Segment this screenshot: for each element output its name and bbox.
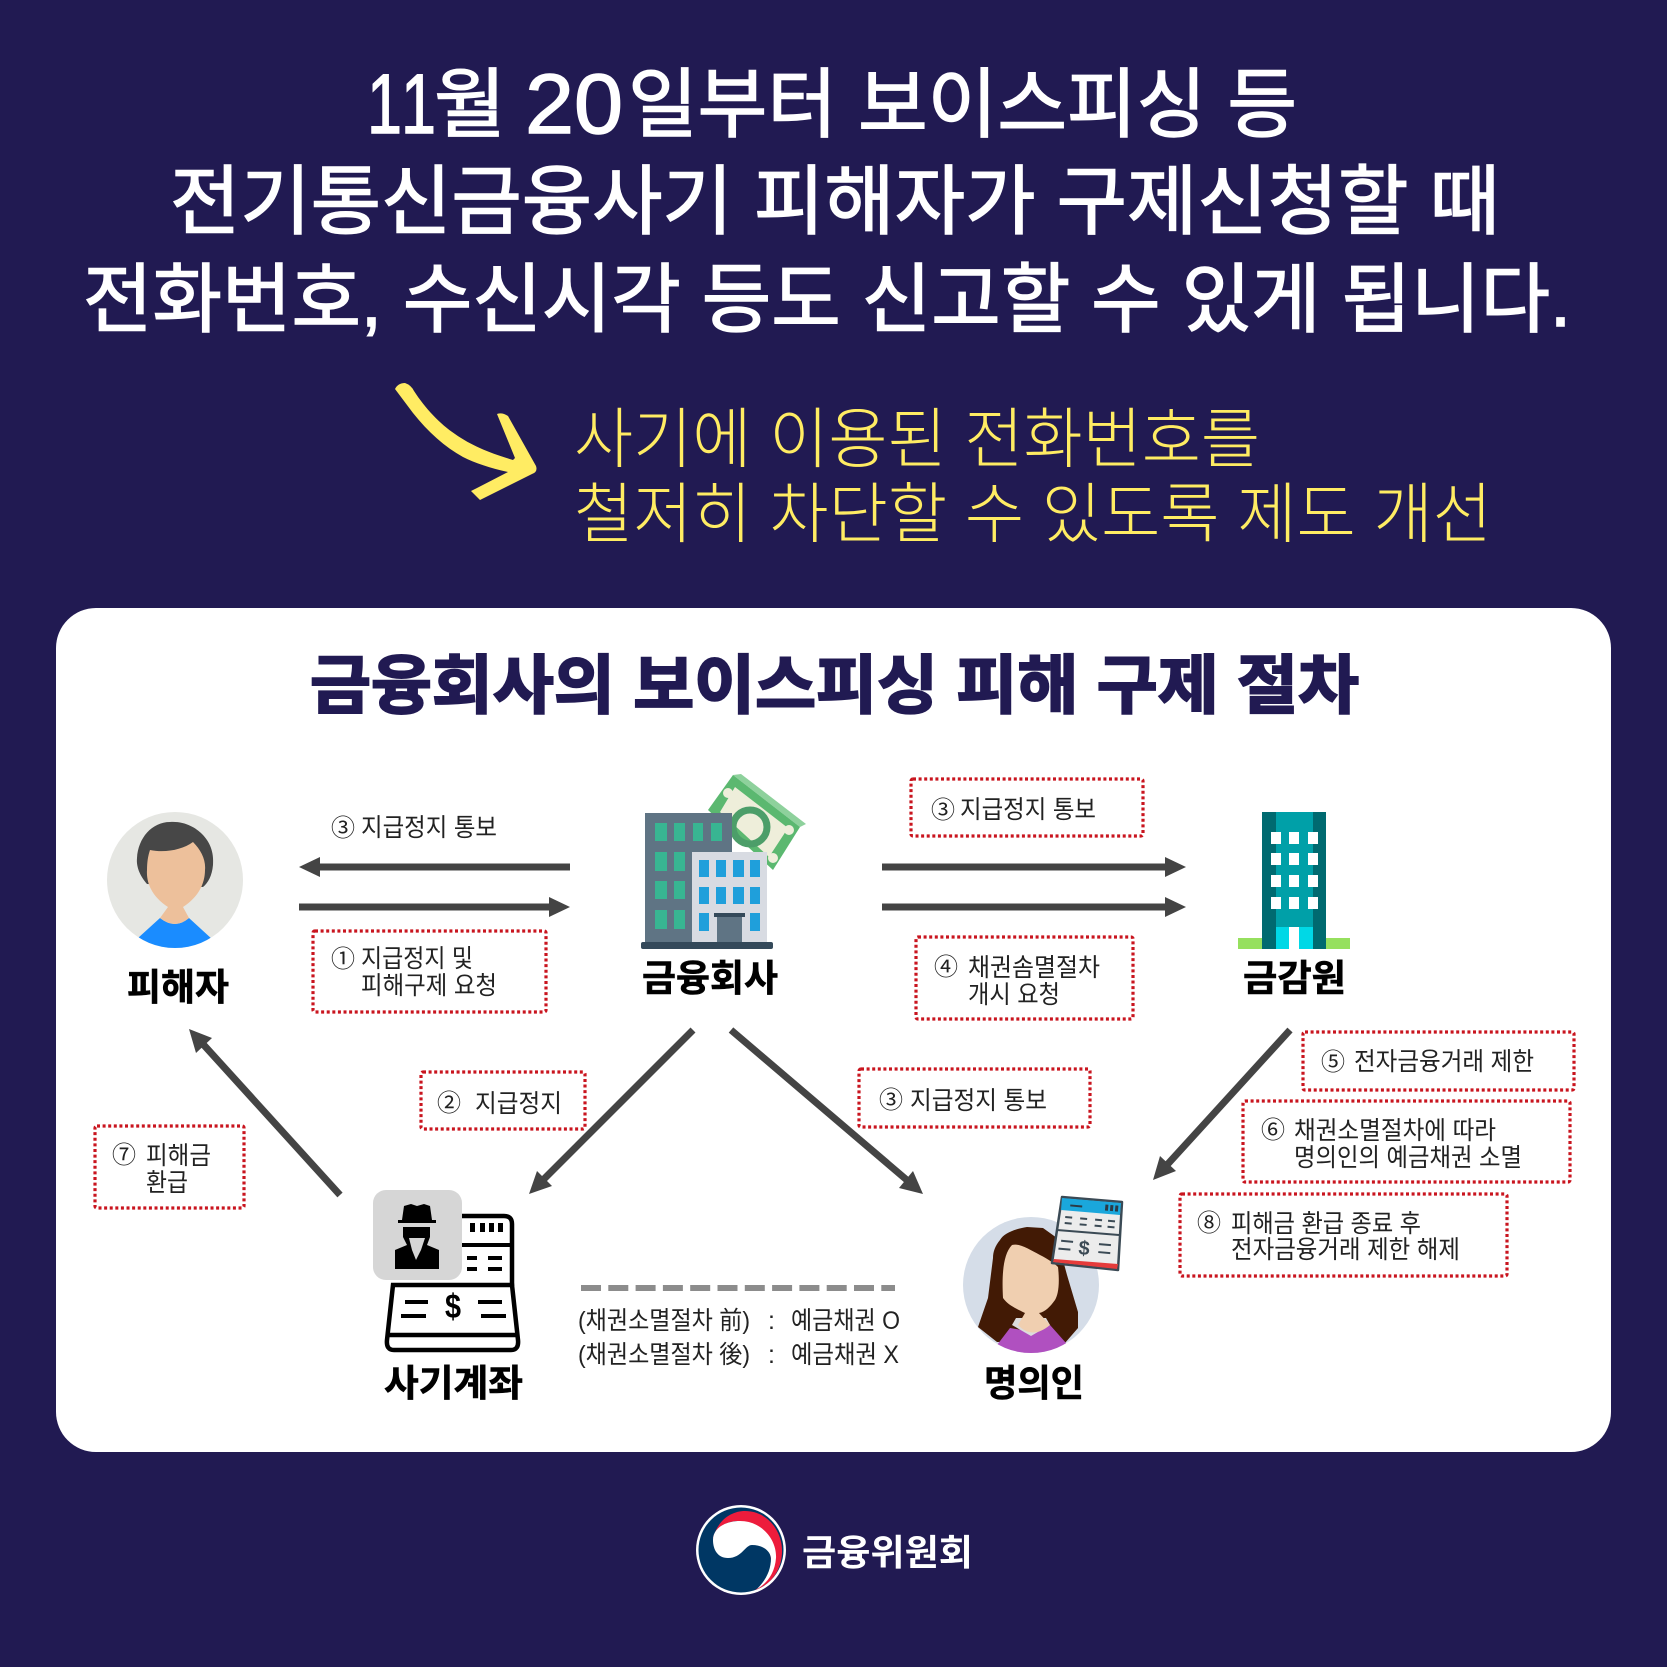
callout: step 3 to holder [859,1069,1090,1127]
legend: bond status: 예금채권 X [791,1341,899,1369]
callout: step 2 [421,1072,585,1129]
callout: step 6: ⑥ [1261,1117,1285,1144]
callout: step 8: 전자금융거래 제한 해제 [1231,1236,1460,1264]
icon: account holder [963,1217,1099,1360]
callout: step 4: 개시 요청 [968,981,1060,1009]
legend: bond status: 예금채권 O [791,1307,900,1335]
icon: financial company [641,774,806,949]
icon: taegeuk emblem [696,1505,786,1595]
callout: step 8: ⑧ [1197,1210,1221,1237]
label: financial company: 금융회사 [642,958,778,999]
arrow: company to fraud account [529,1030,693,1194]
callout: step 3 to holder: ③ [879,1087,903,1114]
callout: step 5: ⑤ [1321,1049,1345,1076]
footer logo [696,1505,973,1595]
title: 1 [401,57,436,151]
arrow: to FSS top [882,857,1186,877]
arrow: from victim [299,897,570,917]
callout: step 8: 피해금 환급 종료 후 [1231,1210,1421,1238]
label: fraud account: 사기계좌 [384,1363,523,1404]
label: account holder: 명의인 [984,1363,1084,1404]
subtitle: 사기에 이용된 전화번호를 [574,402,1260,476]
icon: yellow arrow [395,383,536,500]
callout: step 3 to FSS [911,779,1143,836]
callout: step 1: ① [331,946,355,973]
title: 월 [434,63,506,148]
callout: step 3 to FSS: 지급정지 통보 [960,796,1096,824]
title: 전기통신금융사기 피해자가 구제신청할 때 [170,160,1500,245]
title [83,57,1571,343]
icon: bankbook card: $ [1078,1237,1091,1260]
callout: step 2: ② [437,1090,461,1117]
legend: bond status: : [768,1341,775,1369]
callout: step 3 to holder: 지급정지 통보 [910,1087,1047,1115]
callout: step 7: 환급 [146,1169,188,1197]
title: 20 [525,57,623,151]
callout: step 4 [916,937,1133,1019]
callout: step 6 [1243,1101,1570,1182]
icon: fraud account: $ [445,1288,461,1326]
callout: step 7: ⑦ [112,1142,136,1169]
callout: step 8 [1180,1194,1507,1276]
subtitle: 철저히 차단할 수 있도록 제도 개선 [574,477,1492,551]
legend: bond status [578,1288,900,1369]
legend: bond status: (채권소멸절차 後) [578,1341,750,1369]
text: FSC name: 금융위원회 [802,1532,973,1573]
icon: fraud account [373,1190,518,1350]
callout: step 2: 지급정지 [475,1090,562,1118]
callout: step 7 [95,1126,244,1208]
arrow: fraud account to victim [189,1029,340,1195]
callout: step 5 [1303,1032,1574,1090]
callout: step 6: 채권소멸절차에 따라 [1294,1117,1496,1145]
label: victim: 피해자 [127,967,229,1008]
icon: FSS tower [1238,812,1350,949]
callout: step 4: ④ [934,954,958,981]
callout: step 1 [313,931,546,1012]
arrow: to victim [299,857,570,877]
callout: step 7: 피해금 [146,1142,211,1170]
callout: step 6: 명의인의 예금채권 소멸 [1294,1144,1522,1172]
callout: step 1: 지급정지 및 [361,945,473,973]
callout: step 3 to FSS: ③ [931,797,955,824]
label: FSS: 금감원 [1243,958,1346,999]
panel: relief procedure [56,608,1611,1452]
title: 1 [367,57,402,151]
text: step 3: 지급정지 통보 [361,814,497,842]
icon: victim [107,812,243,955]
callout: step 1: 피해구제 요청 [361,972,497,1000]
arrow: FSS to holder [1153,1030,1290,1180]
title: 일부터 보이스피싱 등 [628,63,1297,148]
subtitle [574,402,1492,551]
arrow: to FSS bottom [882,897,1186,917]
text: step 3: ③ [331,815,355,842]
legend: bond status: : [768,1307,775,1335]
panel heading: 금융회사의 보이스피싱 피해 구제 절차 [310,650,1359,722]
icon: bankbook card [1052,1197,1122,1270]
callout: step 4: 채권솜멸절차 [968,954,1100,982]
callout: step 5: 전자금융거래 제한 [1354,1048,1534,1076]
title: 전화번호, 수신시각 등도 신고할 수 있게 됩니다. [83,258,1571,343]
arrow: company to account holder [731,1030,923,1194]
legend: bond status: (채권소멸절차 前) [578,1307,750,1335]
